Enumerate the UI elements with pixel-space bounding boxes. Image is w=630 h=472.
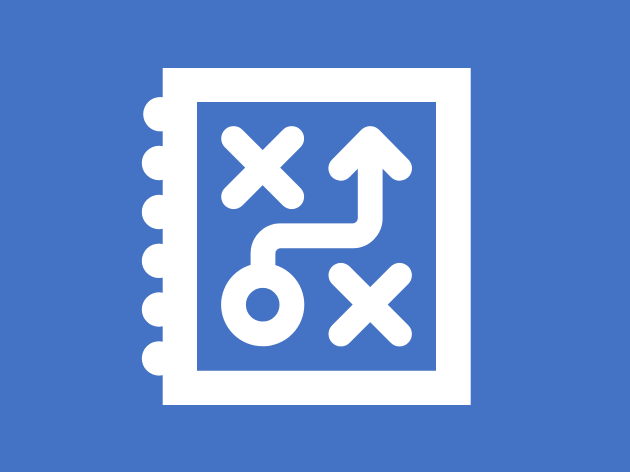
icon: notebook frame	[163, 68, 471, 405]
icon: bottom-right X mark	[341, 275, 400, 334]
icon: top-left X mark	[234, 138, 292, 197]
arrow: play route from circle to arrowhead	[263, 138, 400, 280]
icon: circle marker	[234, 276, 292, 334]
icon: notebook spiral tabs	[142, 97, 178, 376]
